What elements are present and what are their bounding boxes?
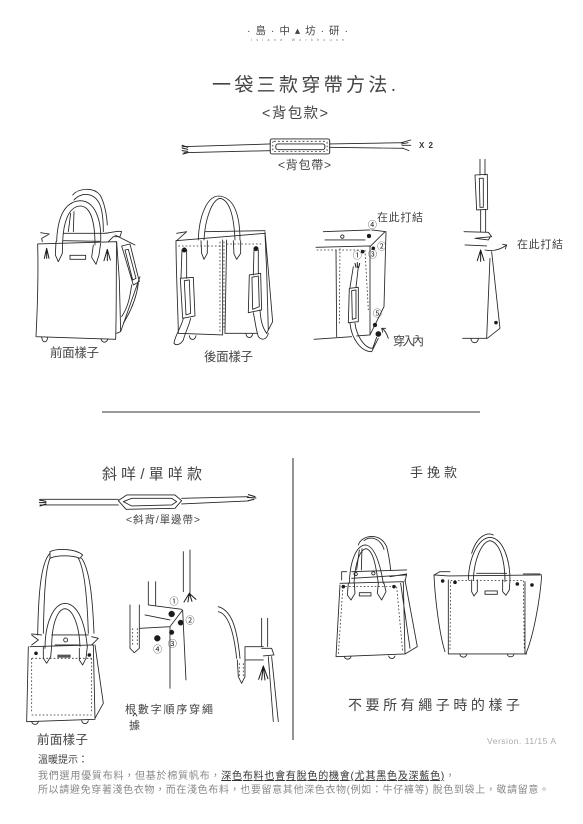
note: tie a knot here: 在此打結 xyxy=(377,210,423,224)
strap label: <背包帶> xyxy=(278,158,331,172)
diagram: numbered threading order: ④ xyxy=(153,644,162,654)
brand header: ·島·中▴坊·研· xyxy=(247,24,348,37)
note: threading order: 根數字順序穿繩 xyxy=(125,702,213,716)
strap quantity: X 2 xyxy=(419,141,434,150)
diagram: threading the strap: ① xyxy=(353,251,362,261)
crossbody strap label: <斜背/單邊帶> xyxy=(126,513,200,526)
care notes xyxy=(38,753,549,796)
diagram: threading the strap: ⑤ xyxy=(373,308,382,318)
diagram: knot side view xyxy=(463,159,507,343)
label: front view: 前面樣子 xyxy=(50,345,99,360)
care notes: 所以請避免穿著淺色衣物，而在淺色布料，也要留意其他深色衣物(例如：牛仔褲等) 脫色到袋上，敬請留意。 xyxy=(38,783,549,796)
diagram: crossbody knot side view xyxy=(218,607,278,722)
heading: backpack style: <背包款> xyxy=(262,105,328,122)
note: thread through: 穿入內 xyxy=(393,333,424,348)
brand header: Island Workhouse xyxy=(251,38,344,42)
backpack strap xyxy=(182,139,411,154)
crossbody strap xyxy=(39,495,256,509)
bag: handbag flat view xyxy=(434,534,542,657)
diagram: numbered threading order: ② xyxy=(185,616,194,626)
note: without any straps: 不要所有繩子時的樣子 xyxy=(348,697,520,713)
vertical divider xyxy=(292,458,294,740)
bag: crossbody front view xyxy=(27,549,103,724)
diagram: numbered threading order xyxy=(130,550,196,688)
label: back view: 後面樣子 xyxy=(204,349,253,364)
version number: Version. 11/15 A xyxy=(487,736,556,746)
diagram: numbered threading order: ① xyxy=(169,597,178,607)
label: crossbody front view: 前面樣子 xyxy=(37,732,88,747)
bag: backpack back view xyxy=(174,196,273,345)
note: threading order: 據 xyxy=(129,718,140,732)
note: threading order xyxy=(125,702,213,732)
title: 一袋三款穿帶方法. xyxy=(212,74,396,96)
diagram: numbered threading order: ③ xyxy=(168,639,177,649)
note: tie a knot here (side): 在此打結 xyxy=(517,237,563,251)
diagram: threading the strap: ③ xyxy=(368,249,377,259)
diagram: threading the strap: ④ xyxy=(368,220,377,230)
heading: handbag style: 手挽款 xyxy=(410,465,457,480)
diagram: threading the strap xyxy=(314,220,388,352)
diagram: threading the strap: ② xyxy=(377,242,386,252)
section divider xyxy=(102,411,480,413)
bag: backpack front view xyxy=(36,189,140,342)
care notes: 溫暖提示： xyxy=(38,753,88,766)
brand header xyxy=(247,24,348,42)
heading: crossbody style: 斜咩/單咩款 xyxy=(102,466,202,483)
care notes: 我們選用優質布料，但基於棉質帆布，深色布料也會有脫色的機會(尤其黑色及深藍色)， xyxy=(38,769,455,782)
bag: handbag angled view xyxy=(336,536,417,659)
